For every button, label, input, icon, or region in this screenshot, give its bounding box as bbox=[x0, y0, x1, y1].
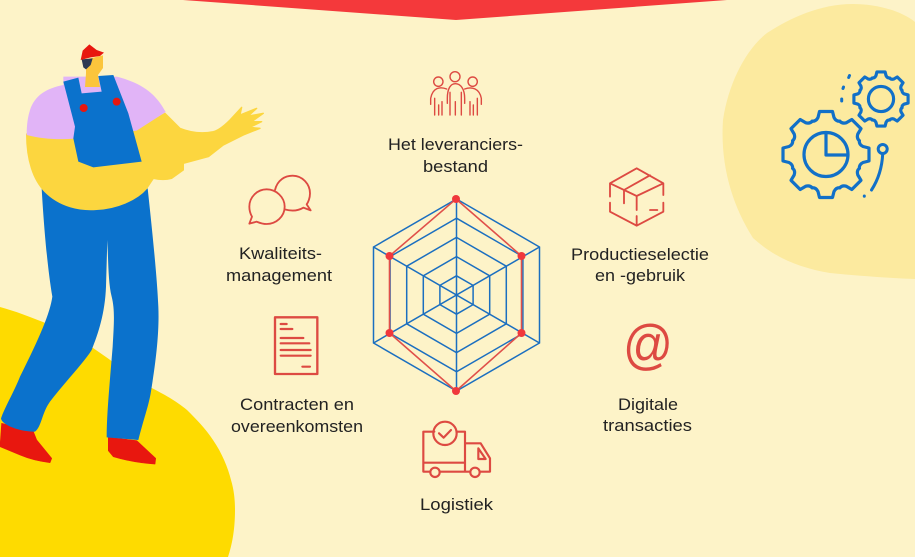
radar chart bbox=[374, 195, 540, 395]
icon: box bbox=[610, 168, 663, 226]
neck and face bbox=[85, 55, 103, 87]
overall buttons bbox=[80, 104, 88, 112]
label: Het leveranciers-bestand: Het leveranciers- bbox=[388, 135, 523, 154]
label: Contracten en overeenkomsten: overeenkomsten bbox=[231, 417, 363, 436]
trousers bbox=[1, 188, 159, 440]
label: Contracten en overeenkomsten bbox=[231, 395, 363, 436]
label: Digitale transacties bbox=[603, 395, 692, 435]
radar grid bbox=[374, 199, 540, 391]
yellow ground blob bbox=[0, 307, 235, 557]
hair bbox=[82, 58, 93, 69]
icon: speech bubbles bbox=[249, 176, 311, 224]
worker figure bbox=[0, 44, 263, 464]
radar data polygon bbox=[390, 199, 522, 391]
label: Kwaliteitsmanagement: management bbox=[226, 266, 332, 285]
shoes bbox=[0, 423, 156, 464]
radar data points bbox=[386, 195, 526, 395]
icon: big gear with pie chart bbox=[783, 112, 869, 198]
label: Kwaliteitsmanagement bbox=[226, 244, 332, 285]
cap bbox=[81, 44, 104, 60]
icon: document bbox=[275, 317, 317, 374]
label: Productieselectie en -gebruik: Productieselectie bbox=[571, 245, 709, 264]
label: Contracten en overeenkomsten: Contracten en bbox=[240, 395, 354, 414]
label: Productieselectie en -gebruik bbox=[571, 245, 709, 285]
top red banner bbox=[183, 0, 727, 20]
label: Kwaliteitsmanagement: Kwaliteits- bbox=[239, 244, 322, 263]
label: Het leveranciers-bestand: bestand bbox=[423, 157, 488, 176]
blob shape bbox=[723, 4, 915, 279]
icon: gear accents bbox=[842, 76, 887, 196]
label: Productieselectie en -gebruik: en -gebruik bbox=[595, 266, 686, 285]
icon: people bbox=[431, 72, 481, 115]
icon: truck bbox=[423, 422, 490, 477]
label: Het leveranciers-bestand bbox=[388, 135, 523, 176]
icon: at sign: @ bbox=[623, 313, 673, 375]
label: Digitale transacties: Digitale bbox=[618, 395, 678, 414]
pale yellow blob with gears bbox=[723, 4, 915, 279]
shirt bbox=[27, 77, 166, 139]
arms and belly bbox=[27, 107, 263, 210]
label: Logistiek: Logistiek bbox=[420, 495, 494, 514]
icon: small gear bbox=[854, 72, 908, 126]
overall bib bbox=[63, 75, 142, 167]
label: Digitale transacties: transacties bbox=[603, 416, 692, 435]
